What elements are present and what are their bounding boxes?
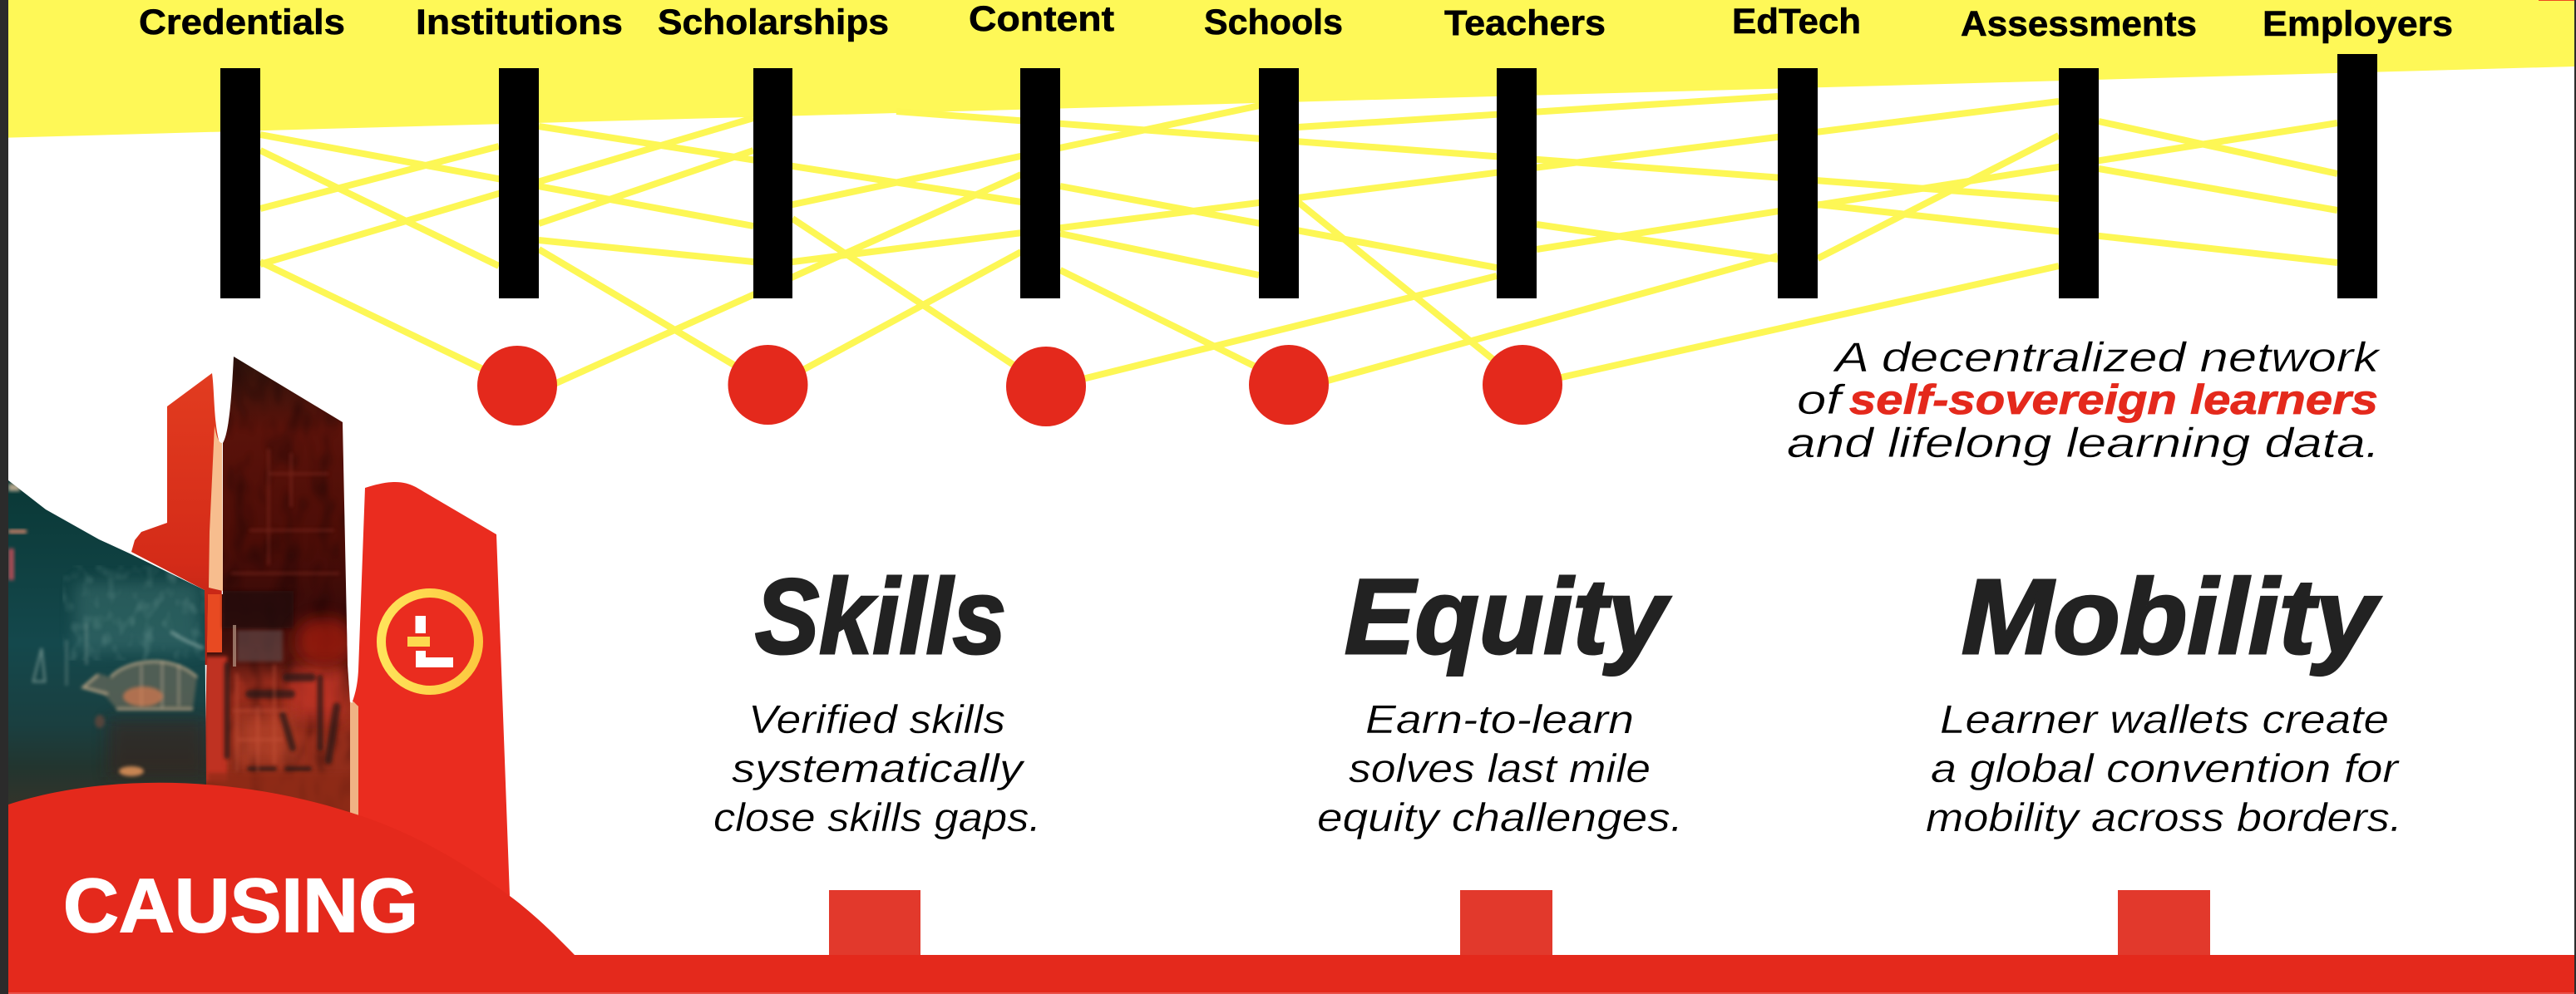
column: Content: [969, 0, 1114, 298]
section heading: causing: CAUSING: [63, 864, 418, 948]
column: EdTech: EdTech: [1732, 2, 1861, 42]
tagline: [1787, 334, 2382, 466]
column: mobility: [1926, 558, 2402, 840]
text: equity description: Earn-to-learn: [1365, 698, 1634, 742]
text: equity description: equity challenges.: [1317, 796, 1683, 840]
peach stripe: [209, 426, 223, 591]
teal building: [8, 480, 206, 806]
column: Scholarships: [658, 2, 889, 298]
stakeholder columns with labels: [139, 0, 2453, 298]
peach edge: [350, 701, 358, 818]
network connection lines: [260, 96, 2337, 394]
text: mobility description: Learner wallets create: [1940, 698, 2389, 742]
text: skills description: systematically: [732, 747, 1026, 791]
yellow header band: [8, 0, 2574, 138]
text: mobility description: a global convention for: [1931, 747, 2400, 791]
column: Scholarships: Scholarships: [658, 2, 889, 42]
column: Institutions: Institutions: [416, 2, 623, 42]
illustration: city towers: [8, 357, 510, 896]
heading: mobility: Mobility: [1962, 558, 2381, 677]
column: Credentials: [139, 2, 345, 298]
column: Institutions: [416, 2, 623, 298]
orange tower: [131, 373, 223, 665]
red hill banner: [8, 783, 575, 994]
logo: [381, 593, 479, 690]
tagline: and lifelong learning data.: [1787, 420, 2380, 466]
column: equity: [1317, 558, 1683, 840]
column: skills: [713, 558, 1041, 840]
text: skills description: [713, 698, 1041, 840]
red tower with logo: [353, 482, 510, 896]
dark tower: [205, 357, 350, 816]
tagline: of: [1797, 376, 1846, 423]
column: Schools: Schools: [1204, 2, 1343, 42]
red square: mobility: [2118, 890, 2210, 955]
red square: skills: [829, 890, 920, 955]
text: mobility description: mobility across borders.: [1926, 796, 2402, 840]
column: Credentials: Credentials: [139, 2, 345, 42]
tagline: A decentralized network: [1832, 334, 2382, 381]
column: Schools: [1204, 2, 1343, 298]
column: Assessments: [1961, 4, 2197, 298]
tagline: self-sovereign learners: [1849, 376, 2378, 423]
text: mobility description: [1926, 698, 2402, 840]
column: Teachers: Teachers: [1444, 3, 1606, 43]
column: EdTech: [1732, 2, 1861, 298]
heading: skills: Skills: [755, 558, 1006, 677]
bottom red bar: [8, 955, 2574, 994]
column: Teachers: [1444, 3, 1606, 298]
column: Employers: [2263, 4, 2453, 298]
text: equity description: [1317, 698, 1683, 840]
column: Assessments: Assessments: [1961, 4, 2197, 44]
column: Employers: Employers: [2263, 4, 2453, 44]
text: equity description: solves last mile: [1349, 747, 1651, 791]
red learner nodes: [477, 345, 1562, 426]
red square: equity: [1460, 890, 1552, 955]
heading: equity: Equity: [1345, 558, 1671, 677]
column: Content: Content: [969, 0, 1114, 39]
text: skills description: close skills gaps.: [713, 796, 1041, 840]
text: skills description: Verified skills: [748, 698, 1005, 742]
